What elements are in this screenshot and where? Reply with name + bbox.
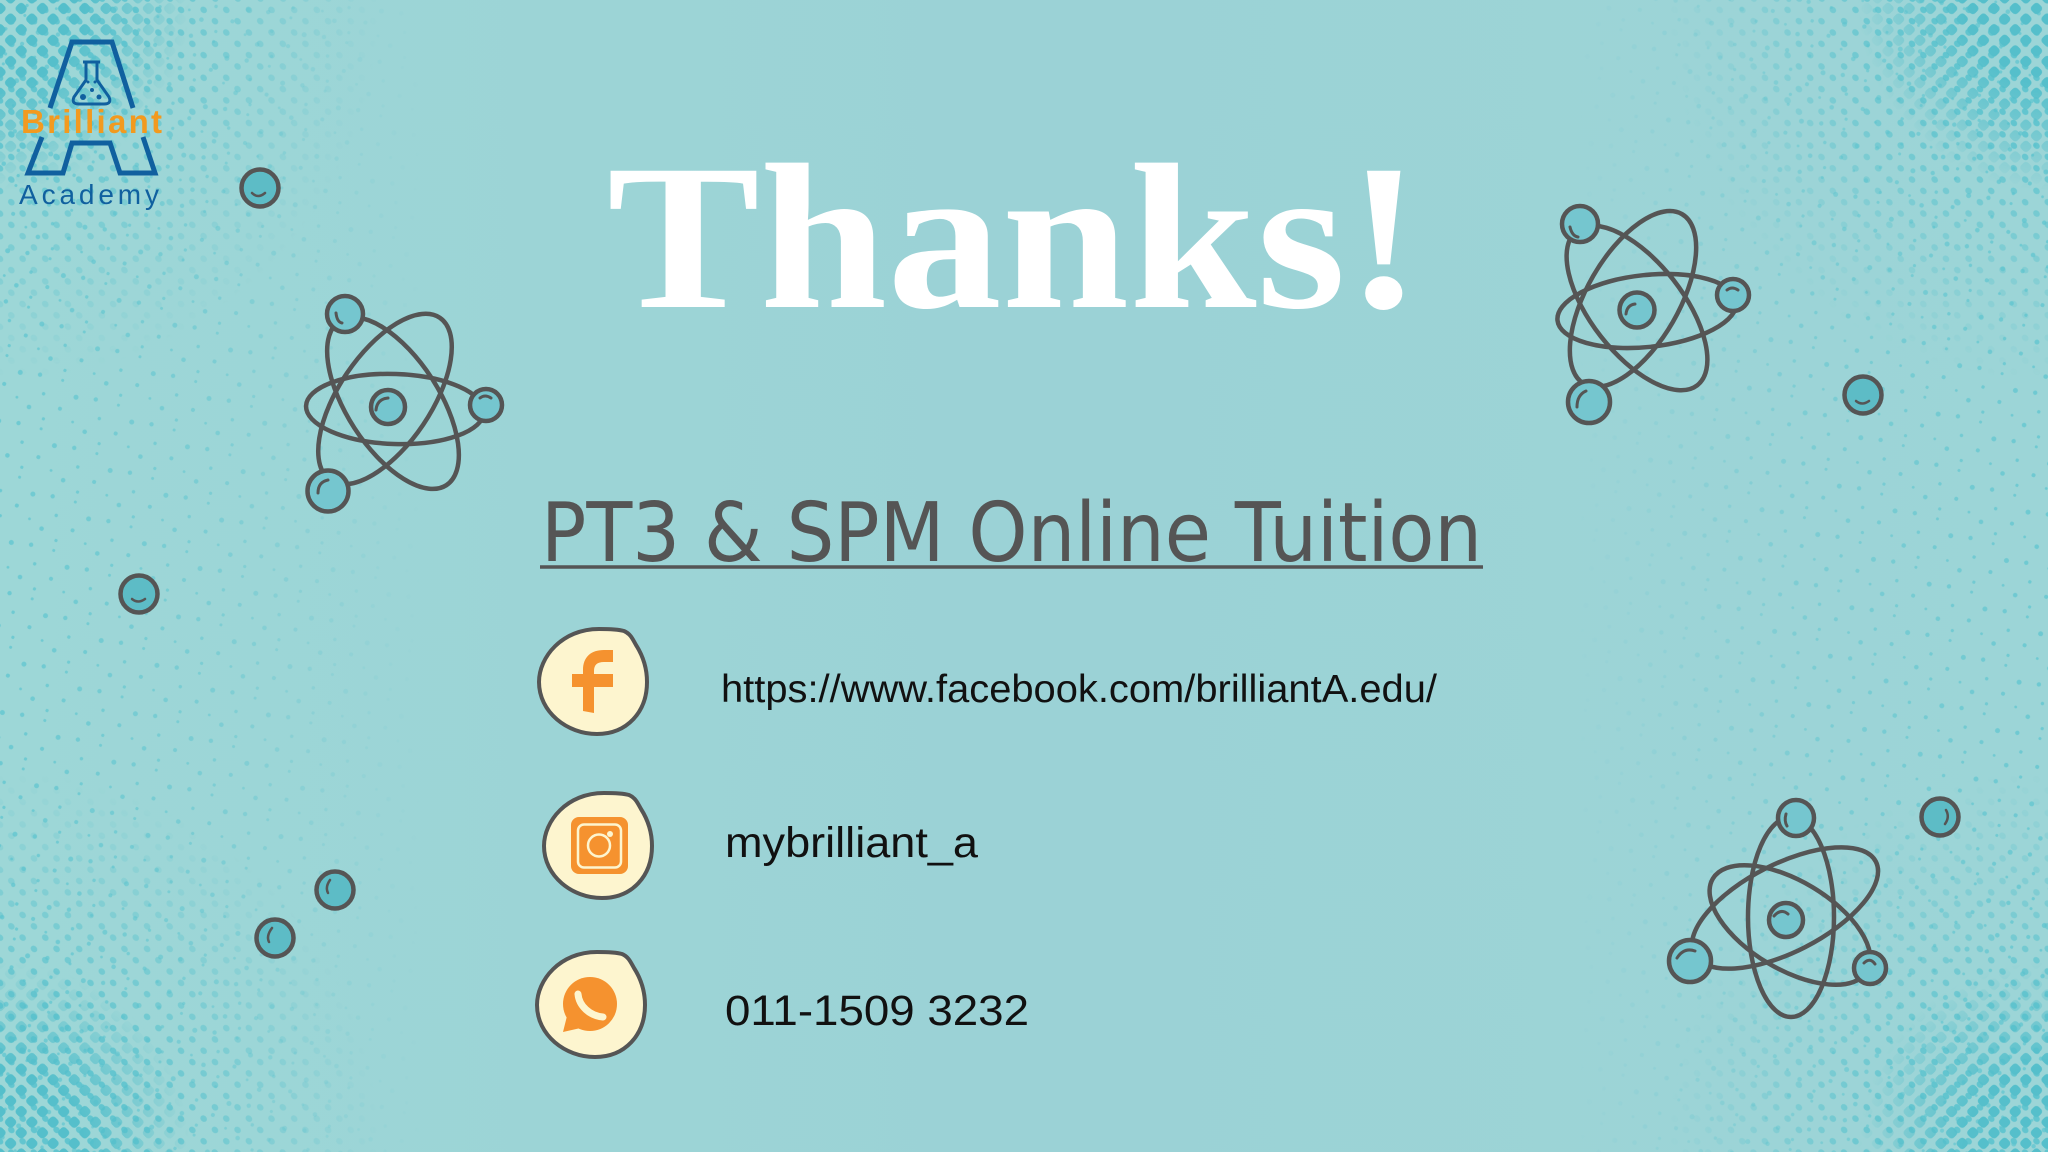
subtitle: PT3 & SPM Online Tuition [541,486,1482,581]
atom: bottom right [1669,800,1896,1017]
icon: instagram [544,793,652,898]
ball 5 [1844,376,1882,414]
ball highlights [132,193,1948,942]
icon: whatsapp [537,952,645,1057]
atom: top right [1540,191,1749,423]
ball 6 [1922,798,1958,836]
icon: flask [73,62,110,104]
atom: left [292,292,502,512]
logo: Brilliant Academy [19,42,162,210]
logo text: Academy: Academy [19,179,159,210]
icon: letter A outline [28,42,155,173]
ball 2 [120,576,158,612]
ball 3 [316,872,354,908]
icon: facebook [539,629,647,734]
contact: facebook url: https://www.facebook.com/brilliantA.edu/ [721,668,1437,711]
title: Thanks! [607,122,1422,352]
logo text: Brilliant: Brilliant [21,103,162,140]
contact: phone number: 011-1509 3232 [725,987,1029,1035]
small balls [120,170,1958,956]
ball 1 [242,170,278,206]
ball 4 [256,920,294,956]
contact: instagram handle: mybrilliant_a [725,819,978,867]
